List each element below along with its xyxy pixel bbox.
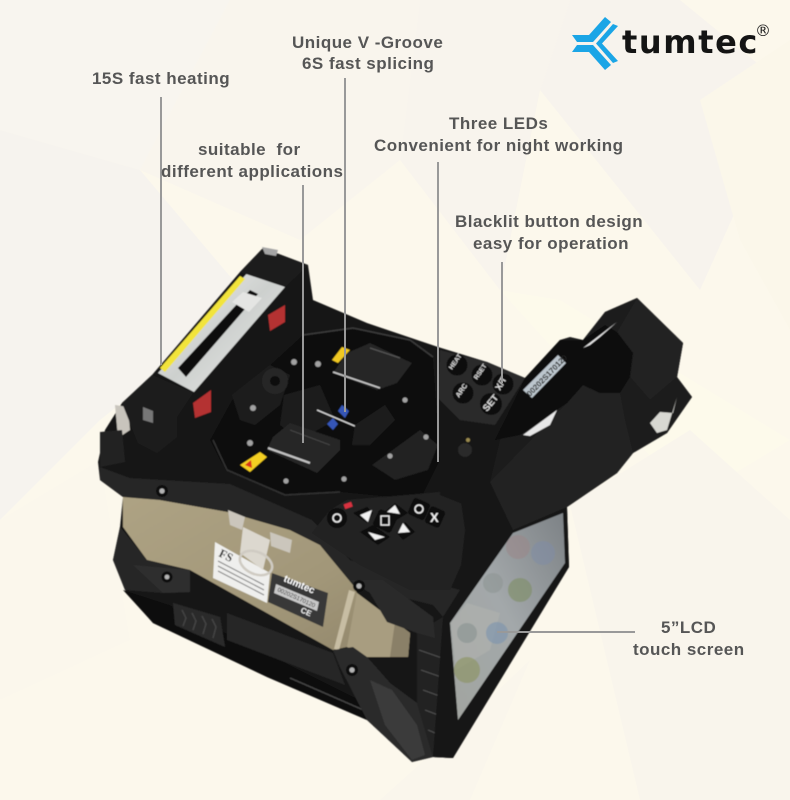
corner bumper: upper right xyxy=(350,580,435,638)
callout: Unique V-Groove: Unique V -Groove xyxy=(292,33,443,52)
keypad: round function buttons: HEAT xyxy=(448,353,464,371)
callout: Backlit button design xyxy=(455,212,643,383)
keypad: round function buttons: X/T xyxy=(493,374,509,392)
lid metal tabs xyxy=(583,322,617,348)
logo: tumtec xyxy=(572,17,771,70)
callout: Unique V-Groove xyxy=(292,33,443,412)
callout: Three LEDs xyxy=(374,114,624,462)
callout: suitable for different applications xyxy=(161,140,343,443)
keypad: round function buttons: ARC xyxy=(455,383,469,399)
lid: opened wind cover: 00202S170120 xyxy=(525,353,570,398)
callout: suitable for different applications: different applications xyxy=(161,162,343,181)
warning sticker: front xyxy=(240,452,267,472)
callout: suitable for different applications: suitable for xyxy=(198,140,301,159)
warning sticker: top xyxy=(332,347,350,363)
keypad: round function buttons: RSET xyxy=(473,363,489,381)
lid label xyxy=(523,355,566,398)
right clamp blocks xyxy=(352,405,395,445)
callout: 15S fast heating: 15S fast heating xyxy=(92,69,230,88)
lid: opened wind cover xyxy=(490,298,692,530)
label on body: CE xyxy=(299,606,314,619)
keypad: front control panel xyxy=(312,492,465,590)
wind cover: front xyxy=(267,423,340,473)
silhouette: black backing xyxy=(98,248,692,762)
base: lower housing shading xyxy=(123,590,367,720)
registered mark: ® xyxy=(755,21,771,40)
screen: 5 inch LCD xyxy=(433,507,569,758)
V-groove electrodes xyxy=(317,405,357,430)
label on body xyxy=(213,542,328,627)
callout: Backlit button design: Blacklit button design xyxy=(455,212,643,231)
keypad: round function buttons: SET xyxy=(481,393,501,414)
wind cover: top xyxy=(333,343,412,390)
keypad: front control panel: X xyxy=(430,510,439,525)
logo wordmark: tumtec xyxy=(622,23,759,61)
bay screws xyxy=(247,359,429,484)
callout: Three LEDs: Three LEDs xyxy=(449,114,548,133)
callout: Three LEDs: Convenient for night working xyxy=(374,136,624,155)
hinge xyxy=(440,425,510,505)
O and X buttons xyxy=(407,497,431,521)
callout: Unique V-Groove: 6S fast splicing xyxy=(302,54,434,73)
callout: 5 inch LCD touch screen xyxy=(497,618,745,659)
corner bumper: left xyxy=(113,527,190,593)
hinge bracket xyxy=(115,405,130,438)
ribbed side xyxy=(417,617,453,758)
label on body: 00202S170120 xyxy=(276,587,316,610)
label on body: FS xyxy=(217,546,236,565)
heater: glass cover and stripe xyxy=(122,247,308,453)
d-pad buttons xyxy=(383,503,408,522)
power button xyxy=(327,508,347,528)
splicing bay recess xyxy=(210,328,440,500)
bumper screw xyxy=(353,580,365,592)
optical assembly xyxy=(232,365,290,425)
keypad: round function buttons xyxy=(438,350,525,425)
callout: Backlit button design: easy for operation xyxy=(473,234,629,253)
battery door with chevrons xyxy=(173,603,225,647)
callout: 5 inch LCD touch screen: 5”LCD xyxy=(661,618,716,637)
gold body panel xyxy=(123,490,410,657)
icon: blue star mark xyxy=(572,17,618,70)
deck: lip xyxy=(100,467,460,617)
device: fusion splicer xyxy=(98,247,692,762)
callout: 5 inch LCD touch screen: touch screen xyxy=(633,640,745,659)
base panel xyxy=(227,613,345,685)
latch xyxy=(228,510,292,580)
corner bumper: bottom right xyxy=(333,647,433,762)
label on body: tumtec xyxy=(282,574,317,597)
